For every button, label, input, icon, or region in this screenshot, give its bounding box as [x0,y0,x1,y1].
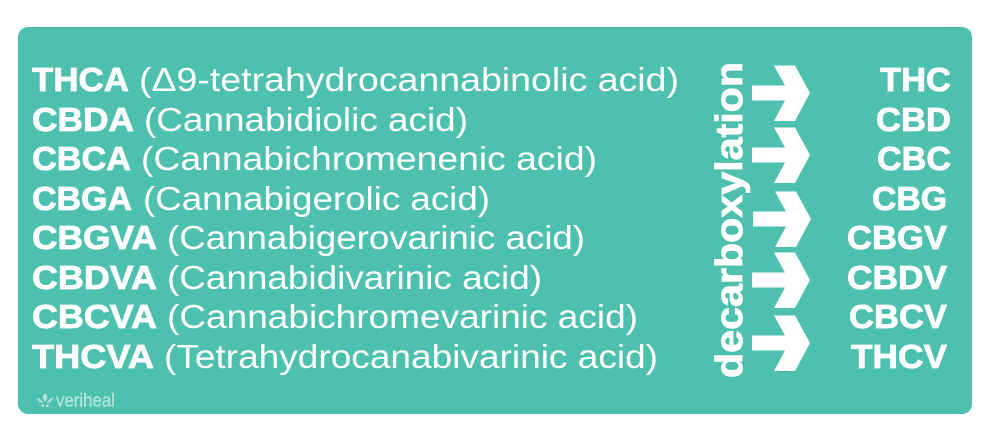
row: CBGVA: (Cannabigerovarinic acid) [167,219,585,256]
row: CBCA: CBCA [32,141,131,178]
row: CBCA [32,140,597,178]
row: THCA: THCA [32,62,129,99]
row: CBCVA: (Cannabichromevarinic acid) [167,298,638,335]
arrow 5 [752,316,810,371]
row: CBDA: CBDA [32,102,134,139]
arrow 1 [752,66,810,121]
label: CBG: CBG [872,181,947,218]
arrows [752,66,811,371]
row: CBDVA [32,259,542,297]
label: CBGV: CBGV [847,220,948,257]
vertical label: decarboxylation: decarboxylation [709,62,751,378]
list: cannabinoid acids [32,61,679,376]
row: CBGVA [32,219,585,257]
row: CBDA: (Cannabidiolic acid) [144,101,468,138]
row: CBCVA [32,298,638,336]
label: THCV: THCV [851,339,948,376]
row: CBDVA: CBDVA [32,260,157,297]
arrow 4 [752,252,810,308]
arrow 3 [753,192,811,247]
arrow 2 [752,128,810,183]
row: CBGVA: CBGVA [32,220,157,257]
label: THC: THC [880,62,951,99]
row: CBGA: (Cannabigerolic acid) [143,180,490,217]
wordmark: veriheal [56,390,115,410]
row: THCVA [32,338,658,376]
logo: veriheal [37,390,115,410]
row: CBDA [32,101,468,139]
row: THCVA: (Tetrahydrocanabivarinic acid) [164,338,658,375]
row: CBCVA: CBCVA [32,299,157,336]
row: CBGA [32,180,490,218]
label: CBD: CBD [876,102,951,139]
row: THCA: (Δ9-tetrahydrocannabinolic acid) [139,61,679,98]
icon: leaf [37,393,53,407]
label: CBCV: CBCV [849,299,948,336]
list: decarboxylated products [847,62,951,376]
row: CBGA: CBGA [32,181,132,218]
row: THCVA: THCVA [32,339,154,376]
label: CBDV: CBDV [847,260,948,297]
row: CBDVA: (Cannabidivarinic acid) [167,259,542,296]
label: CBC: CBC [877,141,951,178]
row: CBCA: (Cannabichromenenic acid) [141,140,597,177]
